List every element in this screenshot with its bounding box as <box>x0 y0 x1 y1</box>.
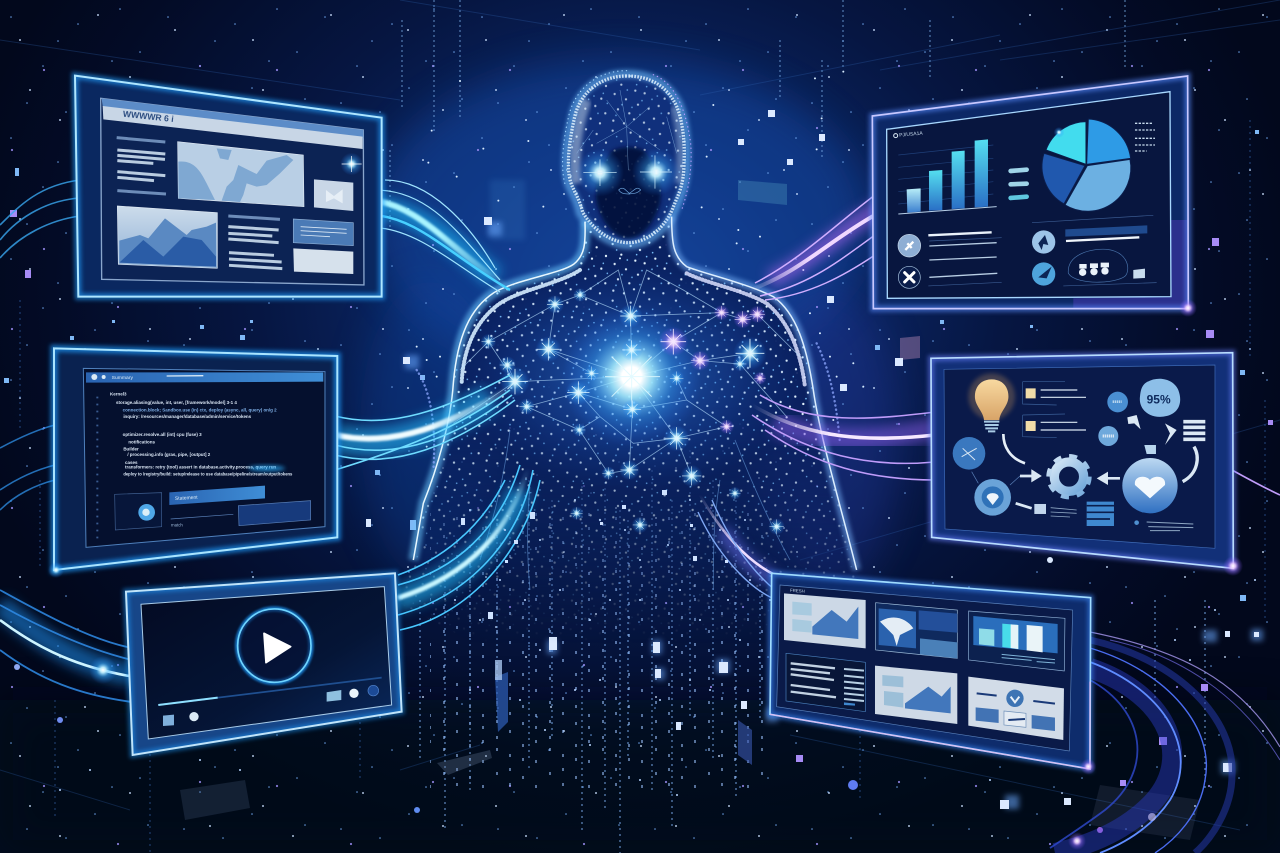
metric rows left <box>898 232 1002 288</box>
heading lines <box>117 138 280 219</box>
code text: transformers: retry (tool) assert in database.activity.process, query run <box>125 465 276 470</box>
panel: code editor <box>54 348 337 570</box>
chest ambient glow <box>458 263 805 490</box>
translucent data blocks <box>180 180 1200 840</box>
thumbnail: bars <box>969 611 1065 671</box>
human figure <box>400 71 863 650</box>
action button: Statement <box>175 495 198 502</box>
text lines <box>117 150 282 269</box>
figure neural network lines <box>453 270 800 476</box>
metric rows right <box>1032 215 1157 286</box>
panel glow frame <box>75 76 382 297</box>
light ribbon: video panel to arm <box>395 465 540 630</box>
mountain chart image <box>117 206 217 268</box>
timeline <box>158 678 382 705</box>
panel glow frame <box>54 348 337 570</box>
spiral light bands <box>1050 632 1280 853</box>
code text: connection.block; Sandbox.use (in) ctx, deploy (async, all, query) on/g 2 <box>123 407 277 412</box>
figure shoulder and arm outlines <box>413 217 857 590</box>
text highlight glow <box>248 465 285 471</box>
editor toolbar: Summary <box>112 375 133 381</box>
falling data particles under figure <box>60 490 1255 795</box>
scattered particles around figure <box>417 72 863 447</box>
figure head <box>563 71 691 245</box>
sparkle <box>340 153 363 175</box>
95 percent blob: 95% <box>1147 392 1171 406</box>
figure body silhouette <box>400 217 863 650</box>
small data card <box>1034 502 1193 531</box>
panel glow frame <box>126 573 402 755</box>
code text: Kernel3 <box>110 391 127 396</box>
code text: inquiry: /resources/manager/database/admin/service/tokens <box>123 414 252 419</box>
code text <box>110 391 293 476</box>
icon: circle nodes <box>953 437 1020 516</box>
panel: thumbnail gallery <box>770 573 1096 775</box>
pie legend <box>1135 123 1155 151</box>
play button <box>238 609 311 682</box>
code text: / processing.info (gras, pipe, [output] 2 <box>127 452 211 457</box>
action button <box>169 486 265 505</box>
map <box>178 142 304 207</box>
output box <box>171 501 311 528</box>
player controls <box>163 685 379 726</box>
legend pills <box>1011 170 1027 184</box>
figure eyes <box>576 148 680 197</box>
icon: heart circle <box>1122 458 1178 513</box>
figure chest nodes <box>480 288 785 535</box>
output box: match <box>171 523 183 528</box>
code text: Builder <box>123 447 139 452</box>
thumbnail: funnel <box>876 603 957 658</box>
gallery title: FRESH <box>790 588 805 594</box>
code text: notifications <box>128 439 155 444</box>
code text: deploy to /registry/build: setup/release to use database/pipeline/stream/output/tokens <box>123 471 293 476</box>
panel glow frame <box>872 76 1188 309</box>
browser window <box>101 98 364 285</box>
panel: analytics dashboard <box>872 76 1188 309</box>
light note box <box>293 248 353 274</box>
code text: cases <box>125 460 138 465</box>
panel: web page <box>75 76 382 297</box>
thumbnail: text list <box>786 653 865 712</box>
line number gutter <box>94 397 100 540</box>
light ribbon: arm to gallery panel <box>698 495 775 598</box>
light ribbon: shoulder to analytics panel <box>750 195 880 300</box>
image thumbnail <box>314 179 353 211</box>
thumbnail: mountain report <box>784 593 866 648</box>
95 percent blob <box>1140 379 1180 417</box>
editor toolbar <box>86 372 323 383</box>
corner flare <box>1080 759 1096 775</box>
dashboard title: PJ/USA1A <box>899 131 924 139</box>
icon: light bulb <box>968 373 1015 431</box>
corner flares <box>48 299 1243 578</box>
legend pill accent <box>1011 197 1027 198</box>
panel glow frame <box>770 573 1091 769</box>
note rows <box>1023 382 1086 438</box>
code text: storage.aliasing(value, int, user, [framework/model] 3-1 4 <box>116 400 237 405</box>
bar chart <box>898 139 997 214</box>
panel: process diagram <box>931 353 1233 568</box>
blue note box <box>293 219 353 246</box>
avatar box <box>115 493 162 530</box>
panel glow frame <box>931 353 1233 568</box>
light ribbon: upper left to shoulder <box>0 180 510 292</box>
browser window: WWWWR 6 i <box>122 109 174 124</box>
flow arrows <box>1003 415 1197 508</box>
code text: optimizer.resolve.all (int) cpu (fuse) 3 <box>123 432 202 437</box>
small blobs <box>1098 392 1128 446</box>
light ribbon: left of video panel <box>0 590 135 702</box>
thumbnail: mountain summary <box>875 666 957 724</box>
pie chart <box>1042 119 1131 211</box>
list stripes <box>1183 422 1205 439</box>
light ribbon: code panel to chest <box>0 375 515 510</box>
thumbnail: icon grid <box>968 677 1064 740</box>
icon: gear <box>1049 456 1089 497</box>
panel: video player <box>126 573 402 755</box>
light ribbon: arm to process panel <box>752 395 1280 495</box>
